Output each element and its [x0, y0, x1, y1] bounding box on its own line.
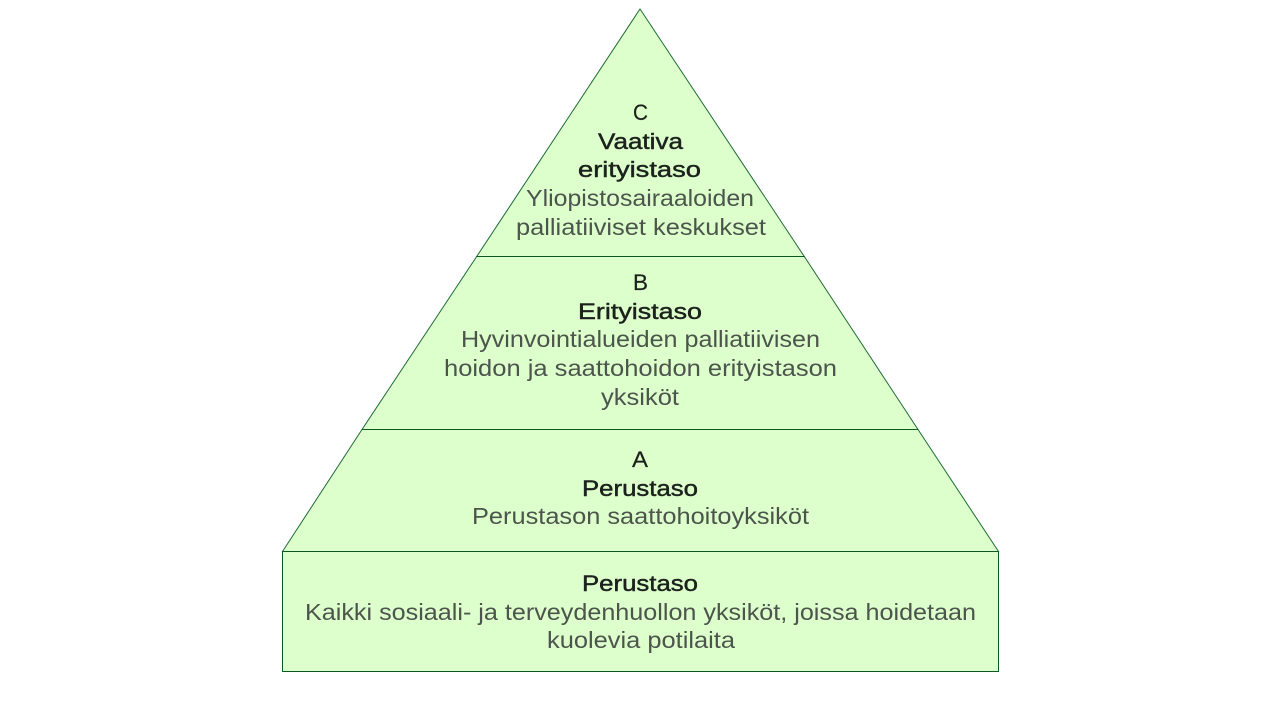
text: base level description [305, 599, 976, 653]
panel: level B, specialist level [362, 256, 918, 430]
heading: Erityistaso: Erityistaso [578, 299, 702, 324]
heading: Vaativa erityistaso: erityistaso [578, 157, 701, 182]
text: level A description: Perustason saattohoitoyksiköt [472, 503, 810, 529]
pyramid [282, 9, 998, 672]
panel: level C, demanding specialist level [477, 9, 804, 256]
text: level B description: Hyvinvointialueiden palliatiivisen [461, 326, 820, 352]
heading: Perustaso: Perustaso [582, 571, 698, 596]
text: level C description: palliatiiviset keskukset [516, 214, 766, 240]
text: base level description: kuolevia potilaita [547, 627, 736, 653]
heading: Vaativa erityistaso: Vaativa [598, 129, 684, 154]
text: level C description [516, 185, 766, 240]
text: level B description: hoidon ja saattohoidon erityistason [444, 355, 837, 381]
panel: level A, basic level [282, 430, 998, 552]
heading: level B: B [633, 270, 648, 295]
text: level C description: Yliopistosairaaloiden [526, 185, 754, 211]
panel: base level [282, 552, 998, 672]
heading: Vaativa erityistaso [578, 129, 701, 182]
text: level B description: yksiköt [601, 384, 680, 410]
text: base level description: Kaikki sosiaali- ja terveydenhuollon yksiköt, joissa hoidetaan [305, 599, 976, 625]
heading: Perustaso: Perustaso [582, 476, 698, 501]
text: level B description [444, 326, 837, 410]
heading: level A: A [632, 447, 648, 472]
heading: level C: C [633, 100, 648, 125]
